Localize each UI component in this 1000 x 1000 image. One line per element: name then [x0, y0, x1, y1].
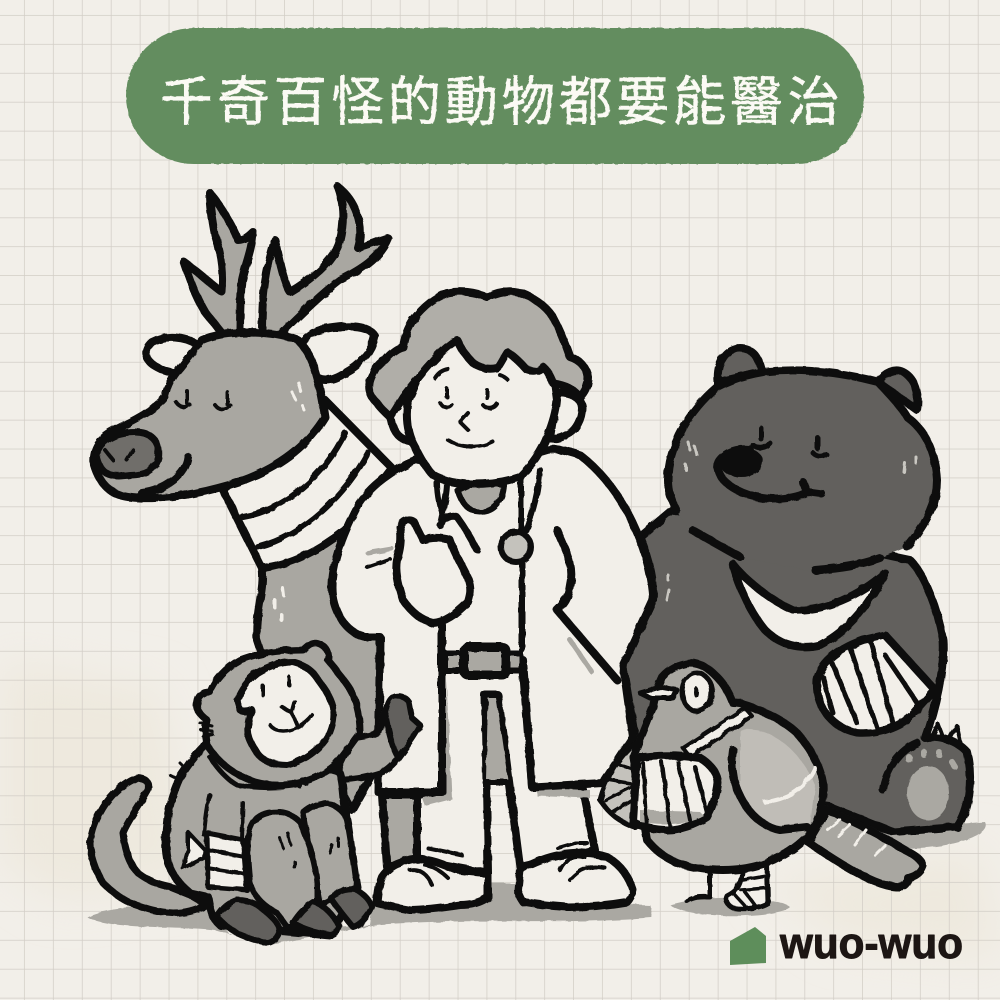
monkey raised arm: [333, 710, 408, 780]
bear arm bandage: [817, 635, 935, 733]
monkey whiskers: [170, 723, 212, 778]
deer right antler: [262, 187, 388, 335]
illustration: pigeon: [600, 663, 923, 909]
pigeon folded wing: [740, 729, 815, 825]
bear head: [668, 370, 937, 572]
deer face: [105, 391, 230, 460]
title text: 千奇百怪的動物都要能醫治: [160, 73, 840, 132]
deer highlights: [275, 382, 304, 620]
logo house icon: [730, 927, 766, 965]
bear ears: [718, 348, 918, 410]
deer body: [257, 530, 380, 810]
pigeon wing bandage: [633, 756, 718, 830]
logo: [730, 919, 963, 968]
doctor face: [407, 335, 557, 484]
illustration: monkey: [90, 643, 420, 943]
doctor trousers: [417, 670, 595, 873]
illustration: bear: [623, 348, 970, 832]
pigeon eye: [682, 673, 712, 711]
doctor sock: [382, 795, 417, 867]
pigeon body: [633, 663, 823, 870]
logo wordmark: wuo-wuo: [779, 919, 963, 968]
doctor left ear: [390, 400, 412, 442]
monkey collar line: [210, 757, 306, 788]
bear nose and muzzle: [723, 451, 759, 473]
doctor raised hand: [396, 520, 470, 623]
monkey feet: [217, 900, 280, 943]
monkey left knee: [248, 812, 317, 927]
doctor right ear: [550, 393, 582, 439]
monkey face: [237, 662, 333, 765]
bear highlights: [667, 442, 916, 600]
doctor belt: [445, 647, 521, 675]
sleeve mark: [368, 549, 392, 553]
bear body: [623, 510, 970, 832]
title banner: [126, 28, 864, 164]
deer left antler: [184, 193, 253, 338]
monkey tail: [90, 778, 207, 913]
monkey head: [197, 643, 360, 785]
trouser gap shade: [486, 698, 508, 780]
doctor face features: [435, 369, 508, 447]
bear chest crescent: [732, 563, 885, 647]
pigeon wing tip bandage: [600, 743, 650, 827]
pigeon strap: [683, 708, 752, 757]
pigeon leg: [687, 866, 710, 901]
illustration: deer: [94, 187, 392, 810]
monkey body: [166, 743, 357, 935]
doctor shoes: [377, 859, 488, 910]
shoe details: [410, 843, 605, 885]
bear claws: [910, 724, 962, 750]
deer head: [94, 332, 325, 498]
deer neck bandage: [223, 400, 392, 568]
bear eyes: [753, 428, 826, 456]
monkey right knee: [303, 803, 357, 905]
doctor hair: [369, 291, 588, 417]
bear foot: [883, 743, 955, 820]
illustration: doctor: [332, 291, 653, 910]
deer right ear: [298, 326, 375, 380]
pigeon leg bandage: [726, 865, 768, 909]
deer left ear: [146, 337, 198, 373]
monkey face features: [263, 677, 312, 731]
pigeon beak: [640, 687, 677, 698]
deer smile: [142, 457, 188, 493]
monkey bandage: [183, 832, 247, 890]
coat fold: [442, 530, 617, 680]
doctor collar: [458, 480, 504, 512]
monkey hand: [385, 696, 420, 757]
ground shadows: [87, 822, 986, 945]
monkey side mark: [204, 795, 243, 840]
doctor white coat: [332, 449, 653, 792]
deer nose: [96, 432, 158, 476]
stethoscope: [437, 470, 540, 650]
pigeon tail: [808, 810, 923, 887]
